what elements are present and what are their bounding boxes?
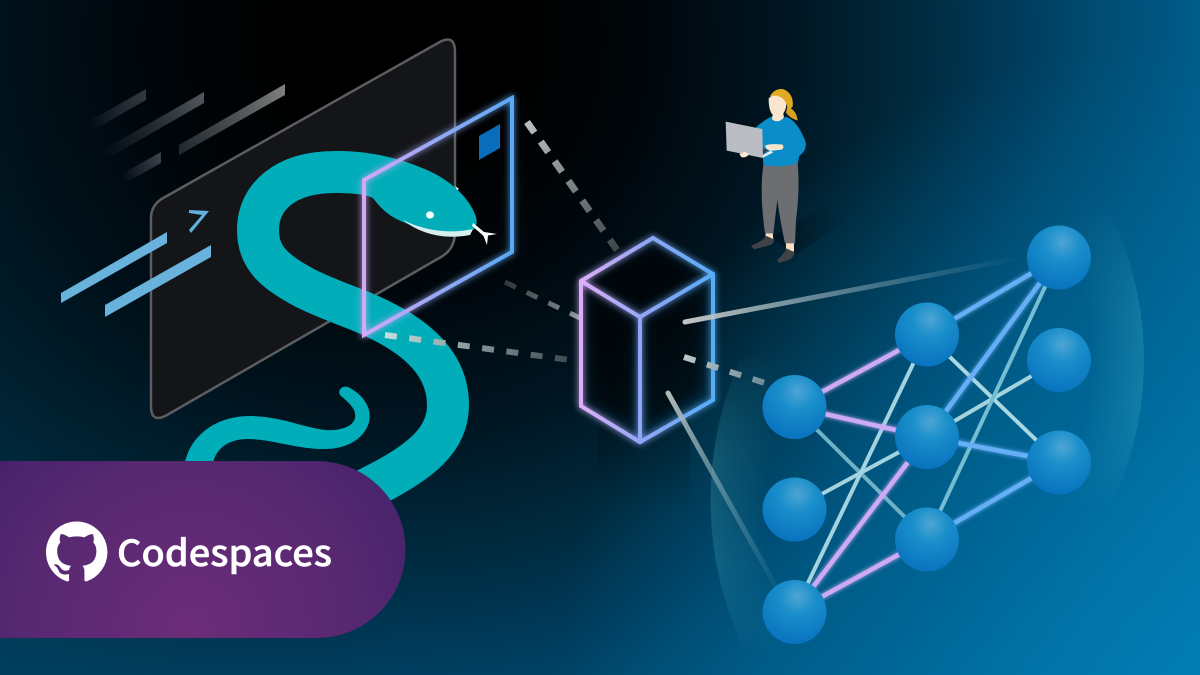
shoes bbox=[751, 236, 795, 263]
ponytail bbox=[786, 107, 798, 121]
person with laptop bbox=[726, 89, 848, 263]
hair bbox=[770, 89, 793, 111]
glowing cube bbox=[581, 238, 713, 442]
head and neck bbox=[769, 94, 786, 121]
hands bbox=[739, 144, 783, 157]
snake jaw bbox=[403, 220, 473, 237]
network nodes bbox=[762, 226, 1091, 644]
cube inner shading bbox=[592, 250, 702, 425]
snake tail bbox=[184, 387, 370, 470]
snake scale tick bbox=[455, 186, 459, 190]
blue square in frame bbox=[479, 124, 500, 160]
solid connector: cube to bottom node bbox=[668, 393, 775, 585]
badge label: Codespaces bbox=[117, 525, 332, 577]
socks bbox=[766, 232, 794, 252]
snake eye bbox=[426, 211, 434, 219]
snake bbox=[184, 151, 497, 503]
code editor panel bbox=[151, 40, 455, 418]
solid connector: cube to top node bbox=[685, 258, 1020, 322]
network edges: muted bbox=[794, 257, 1059, 612]
sweater bbox=[756, 116, 806, 166]
glowing frame bbox=[364, 98, 512, 335]
translucent bubble behind network bbox=[711, 205, 1144, 660]
snake body bbox=[258, 172, 448, 503]
grey speed lines bbox=[88, 84, 285, 185]
snake tongue bbox=[472, 223, 497, 245]
github logo bbox=[46, 522, 107, 581]
network edges: blue bbox=[927, 257, 1059, 539]
person shadow bbox=[772, 198, 848, 255]
network edges: purple bbox=[794, 335, 927, 612]
laptop bbox=[726, 122, 773, 158]
chevron prompt icon bbox=[189, 210, 209, 233]
snake head bbox=[333, 151, 477, 233]
dashed connector: frame to cube middle bbox=[505, 282, 580, 318]
badge pill bbox=[0, 461, 405, 638]
dashed connector: frame to cube top bbox=[527, 122, 617, 250]
blue speed lines bbox=[61, 232, 211, 317]
cube shadow bbox=[598, 415, 690, 510]
legs bbox=[762, 163, 799, 243]
dashed connector: frame corner to cube bbox=[385, 335, 570, 360]
dashed connector: cube to network bbox=[684, 357, 765, 383]
